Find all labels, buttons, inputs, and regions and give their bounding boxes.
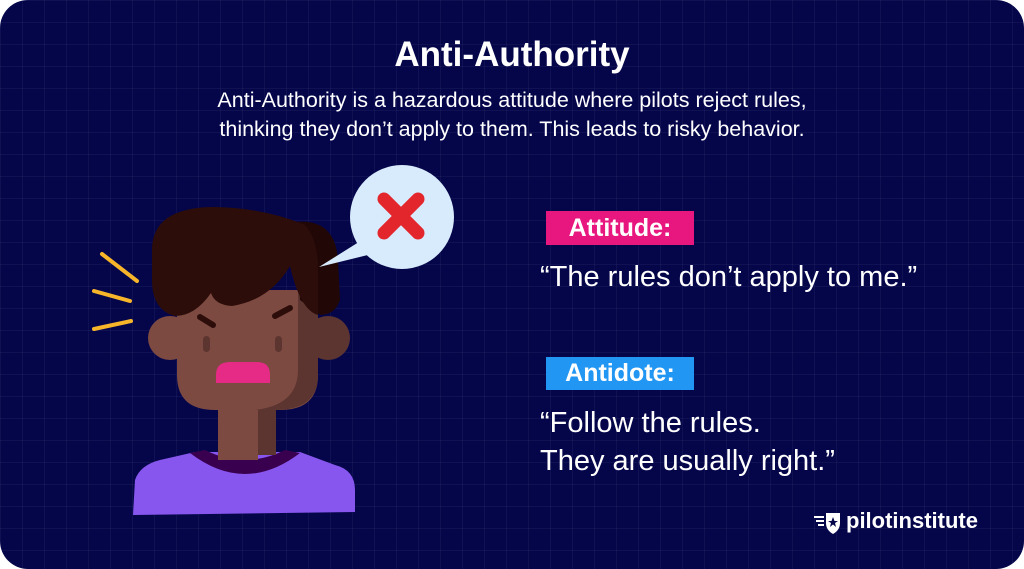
hair (152, 207, 340, 316)
ears (148, 316, 350, 360)
subtitle (217, 88, 807, 141)
face (177, 290, 318, 410)
attitude label (546, 211, 694, 245)
title: Anti-Authority (394, 35, 630, 74)
attitude label: Attitude: (569, 214, 671, 242)
logo: pilotinstitute (846, 508, 978, 533)
subtitle: Anti-Authority is a hazardous attitude where pilots reject rules, (217, 88, 807, 112)
neck (218, 405, 276, 460)
antidote quote (540, 407, 835, 477)
icon: red x (384, 199, 418, 233)
eyes and brows (200, 308, 290, 352)
subtitle: thinking they don’t apply to them. This leads to risky behavior. (219, 117, 805, 141)
antidote quote: They are usually right.” (540, 445, 835, 477)
shirt (133, 450, 355, 515)
speech bubble (319, 165, 454, 269)
antidote label: Antidote: (565, 359, 675, 387)
mouth (216, 362, 270, 383)
illustration: angry person (92, 165, 454, 515)
attitude quote: “The rules don’t apply to me.” (540, 261, 917, 293)
antidote quote: “Follow the rules. (540, 407, 761, 439)
icon: shield (814, 513, 840, 534)
antidote label (546, 357, 694, 390)
icon: yellow lines (94, 254, 137, 329)
